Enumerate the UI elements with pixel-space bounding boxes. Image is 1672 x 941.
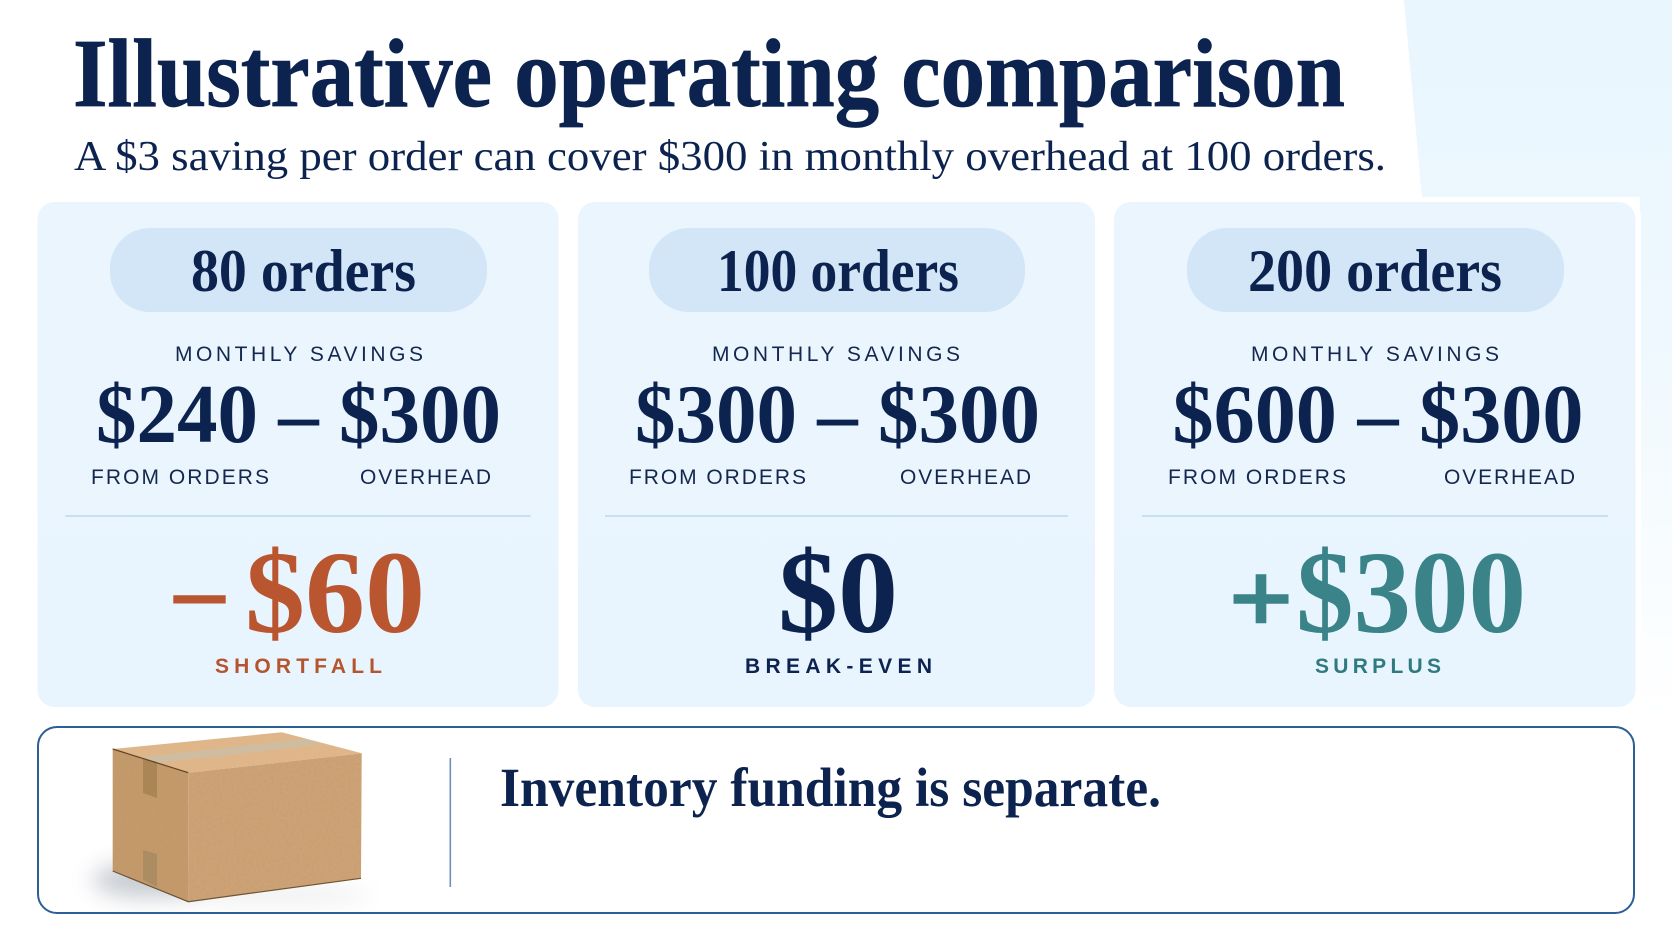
pill: 200 orders [1187, 228, 1564, 312]
equation: savings minus overhead: $240 – $300 [96, 368, 501, 461]
result: plus 300 dollars: $300 [1296, 527, 1526, 658]
pill: 100 orders: 100 orders [717, 238, 959, 304]
label: overhead: OVERHEAD [1444, 466, 1575, 489]
label: monthly savings: MONTHLY SAVINGS [1251, 343, 1499, 366]
note text: Inventory funding is separate. [500, 757, 1161, 818]
result: minus 60 dollars: – [173, 522, 226, 653]
pill: 80 orders: 80 orders [191, 238, 416, 304]
label: monthly savings: MONTHLY SAVINGS [175, 343, 423, 366]
label: from orders: FROM ORDERS [91, 466, 269, 489]
equation: savings minus overhead: $600 – $300 [1172, 368, 1584, 461]
label: overhead: OVERHEAD [360, 466, 491, 489]
panel: 200 orders [1111, 197, 1641, 710]
equation: savings minus overhead: $300 – $300 [635, 368, 1040, 461]
panel: 80 orders [38, 202, 558, 707]
label: monthly savings: MONTHLY SAVINGS [712, 343, 960, 366]
label: from orders: FROM ORDERS [629, 466, 806, 489]
label: from orders: FROM ORDERS [1168, 466, 1346, 489]
status: surplus: SURPLUS [1315, 655, 1441, 678]
status: shortfall: SHORTFALL [215, 655, 382, 678]
panel: inventory note [38, 727, 1634, 913]
label: overhead: OVERHEAD [900, 466, 1031, 489]
title: Illustrative operating comparison [73, 20, 1345, 128]
result: minus 60 dollars: $60 [245, 527, 425, 658]
status: break-even: BREAK-EVEN [745, 655, 932, 678]
pill: 100 orders [649, 228, 1025, 312]
pill: 200 orders: 200 orders [1248, 238, 1502, 304]
result: minus 60 dollars [173, 522, 425, 658]
result: zero dollars: $0 [778, 527, 898, 658]
pill: 80 orders [110, 228, 487, 312]
panel: 100 orders [578, 202, 1095, 707]
icon: cardboard box [92, 732, 370, 902]
result: plus 300 dollars: + [1229, 543, 1293, 654]
subtitle: A $3 saving per order can cover $300 in monthly overhead at 100 orders. [74, 134, 1386, 180]
